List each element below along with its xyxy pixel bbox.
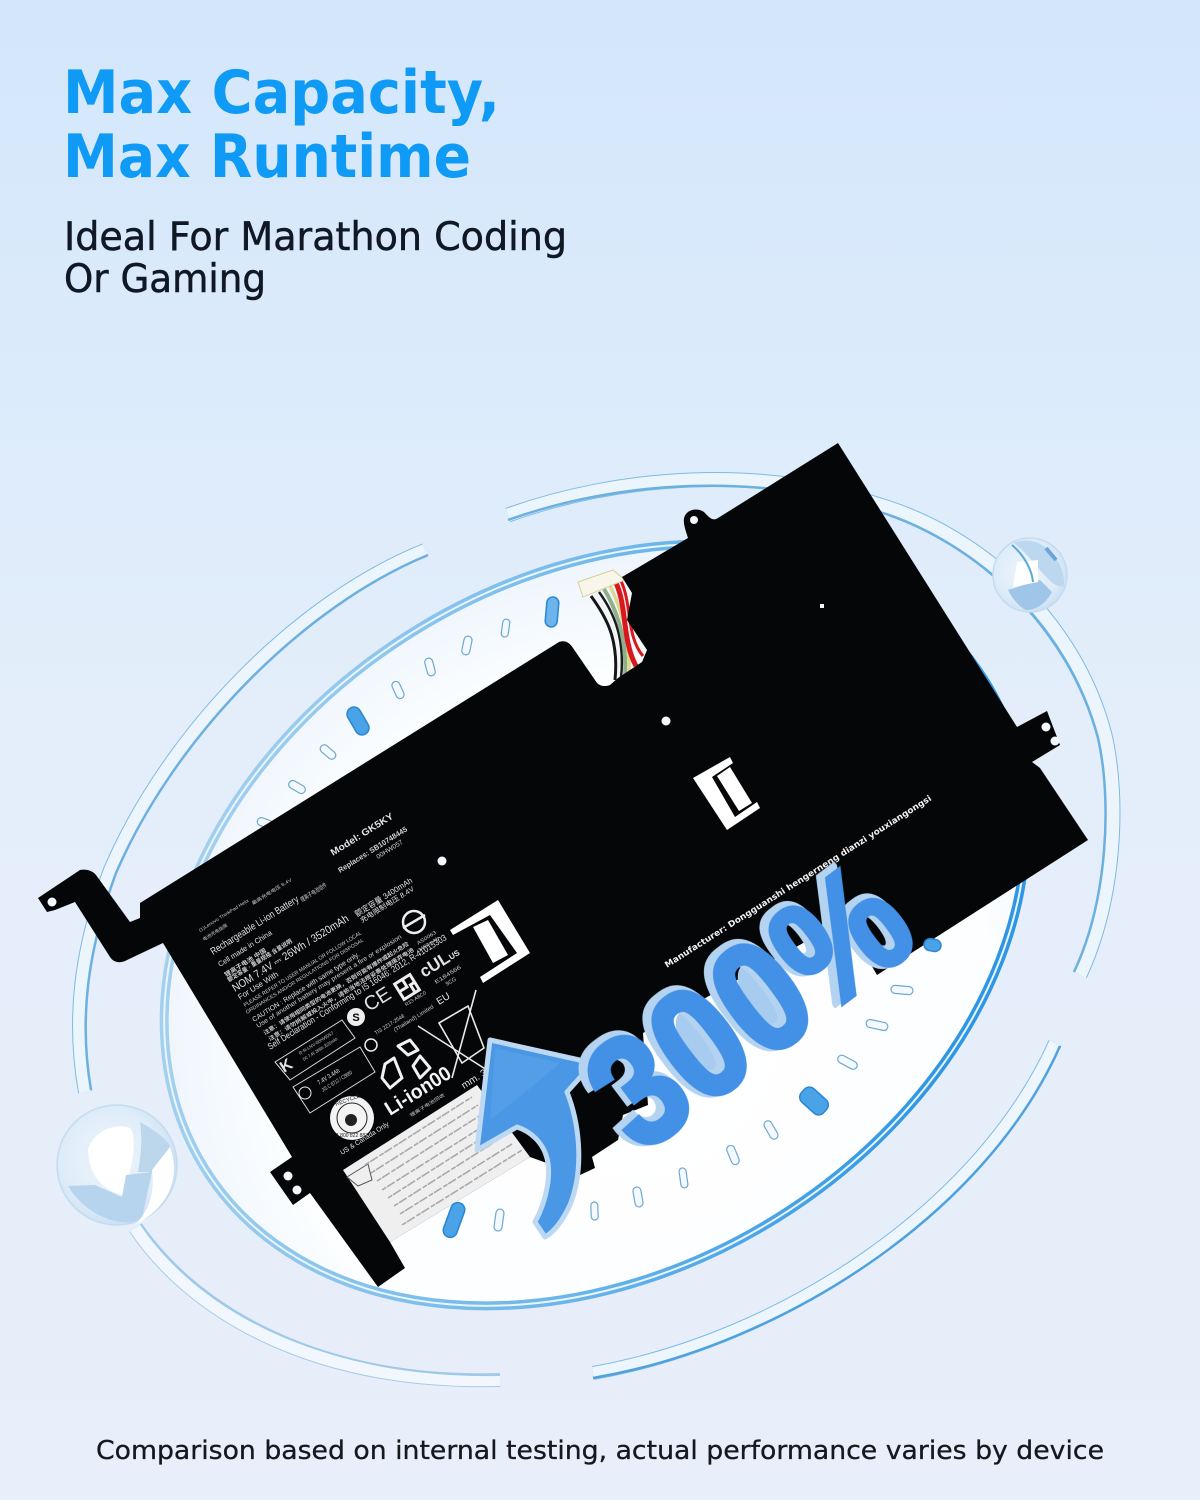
subtitle: Or Gaming bbox=[64, 257, 266, 302]
glass tube: upper left arc bbox=[79, 550, 428, 1092]
battery body bbox=[38, 443, 1088, 1287]
small cjk: 锂离子电池回收 bbox=[408, 1091, 447, 1119]
battery bbox=[38, 443, 1088, 1287]
white specification label bbox=[343, 1085, 530, 1242]
ul mark: US bbox=[447, 948, 462, 962]
upward arrow bbox=[477, 1040, 593, 1237]
glass tube: top right arc bbox=[508, 480, 1113, 975]
rated capacity: 额定容量 3400mAh bbox=[353, 875, 414, 919]
cjk caution: 注意：请使用相同类型的电池更换，否则可能有爆炸或起火危险 bbox=[262, 940, 411, 1037]
for use with: For Use With bbox=[236, 970, 280, 1002]
tiny line 3: 电池充电指南 bbox=[201, 922, 229, 943]
rcm qr mark: R33-ABC0 bbox=[404, 990, 428, 1008]
glass tube: lower right arc bbox=[593, 1043, 1060, 1378]
kc box: K bbox=[277, 1056, 296, 1076]
tiny header line: (1)Lenovo ThinkPad Helix bbox=[198, 897, 250, 933]
certification circle bbox=[403, 911, 441, 954]
ul mark: 9CG bbox=[445, 977, 458, 988]
caution: CAUTION : Replace with same type only. bbox=[251, 951, 361, 1024]
300 percent glass text: 300% bbox=[555, 830, 943, 1183]
certification circle: 3400mAh bbox=[417, 936, 441, 954]
capsule ticks: upper arc bbox=[256, 597, 559, 829]
cjk lines: 锂离子电池 中国 bbox=[223, 946, 268, 979]
glass sphere left bbox=[57, 1105, 177, 1225]
charge voltage: 充电限制电压 8.4V bbox=[358, 884, 416, 925]
voltage box: JIS C 8712 / C8680 bbox=[321, 1070, 354, 1094]
cjk caution 2: 注意：请勿拆解或投入火中，请依当地法规妥善处理废弃电池 bbox=[267, 946, 416, 1043]
white connector bbox=[578, 570, 625, 597]
title bbox=[63, 58, 500, 192]
subtitle: Ideal For Marathon Coding bbox=[64, 215, 567, 260]
title: Max Capacity, bbox=[63, 58, 500, 128]
ul mark bbox=[416, 948, 463, 988]
please refer: PLEASE REFER TO USER MANUAL OR FOLLOW LOCAL bbox=[243, 930, 363, 1009]
recycle s mark: S bbox=[352, 1012, 360, 1024]
inner blue ring bbox=[22, 389, 1168, 1461]
certification circle: AS0063 bbox=[416, 930, 438, 947]
cjk lines 2: 额定容量 · 重量规格 含量说明 bbox=[226, 937, 294, 984]
kc box: R-R-LNV-00HW057 bbox=[298, 1030, 335, 1056]
ul mark: E184566 bbox=[434, 965, 463, 986]
model text: Model: GK5KY bbox=[329, 811, 396, 859]
voltage box bbox=[293, 1047, 375, 1113]
capacity fragment: mm. 34 bbox=[460, 1064, 494, 1092]
tis circle bbox=[365, 1039, 377, 1051]
ordinances: ORDINANCES AND/OR REGULATIONS FOR DISPOSAL bbox=[245, 937, 365, 1016]
replaces text line 2: 00HW057 bbox=[375, 839, 405, 861]
voltage box: 7.4V 3.4Ah bbox=[316, 1067, 342, 1087]
explosion note: Use of another battery may present a fire or explosion bbox=[255, 933, 404, 1030]
logo mark upper bbox=[693, 757, 760, 830]
capsule ticks: lower arc bbox=[441, 938, 942, 1239]
crossed bin bbox=[418, 990, 490, 1078]
connector wires bbox=[591, 581, 646, 680]
eu text: EU bbox=[435, 991, 452, 1008]
self declaration: Self Declaration - Conforming to IS 16046: 2012, R-41015303 bbox=[266, 932, 448, 1052]
logo mark lower bbox=[450, 900, 530, 983]
white disc bbox=[25, 391, 1165, 1459]
tiny header line 2: 最高充电电压 8.4V bbox=[250, 876, 293, 907]
battery name: Rechargeable Li-ion Battery bbox=[209, 894, 301, 958]
subtitle bbox=[64, 215, 567, 302]
recycle symbol bbox=[382, 1040, 430, 1088]
kc box: DC 7.4V 26Wh 3520mAh bbox=[302, 1036, 339, 1062]
thailand text: (Thailand) Limited bbox=[393, 1004, 435, 1034]
li-ion: Li-ion00 bbox=[381, 1062, 455, 1120]
footnote: Comparison based on internal testing, actual performance varies by device bbox=[96, 1436, 1104, 1466]
mounting holes bbox=[48, 516, 1060, 1194]
ul mark: cUL bbox=[416, 948, 453, 981]
rcm qr mark bbox=[393, 972, 428, 1008]
seal: 1 800 822 8837 bbox=[336, 1133, 371, 1139]
replaces text: Replaces: SB10748445 bbox=[336, 825, 409, 875]
glass tube: lower left arc bbox=[135, 1224, 500, 1380]
title: Max Runtime bbox=[63, 122, 471, 192]
digit counters bbox=[666, 957, 796, 1082]
ce mark: CE bbox=[360, 983, 395, 1016]
origin: Cell made in China bbox=[216, 928, 274, 969]
recycle s mark bbox=[347, 1008, 365, 1026]
tis text: TIS 2217-2548 bbox=[374, 1014, 406, 1037]
kc box bbox=[275, 1020, 355, 1080]
manufacturer text: Manufacturer: Dongguanshi hengerneng dianzi youxiangongsi bbox=[663, 794, 934, 971]
nominal rating: NOM 7.4V ⎓ 26Wh / 3520mAh bbox=[230, 913, 351, 995]
seal: RECYCLE bbox=[335, 1093, 361, 1108]
us canada: US & Canada Only bbox=[339, 1121, 391, 1157]
seal bbox=[330, 1093, 374, 1140]
battery cjk: 锂离子电池组件 bbox=[299, 881, 329, 904]
glass sphere right bbox=[993, 538, 1067, 612]
